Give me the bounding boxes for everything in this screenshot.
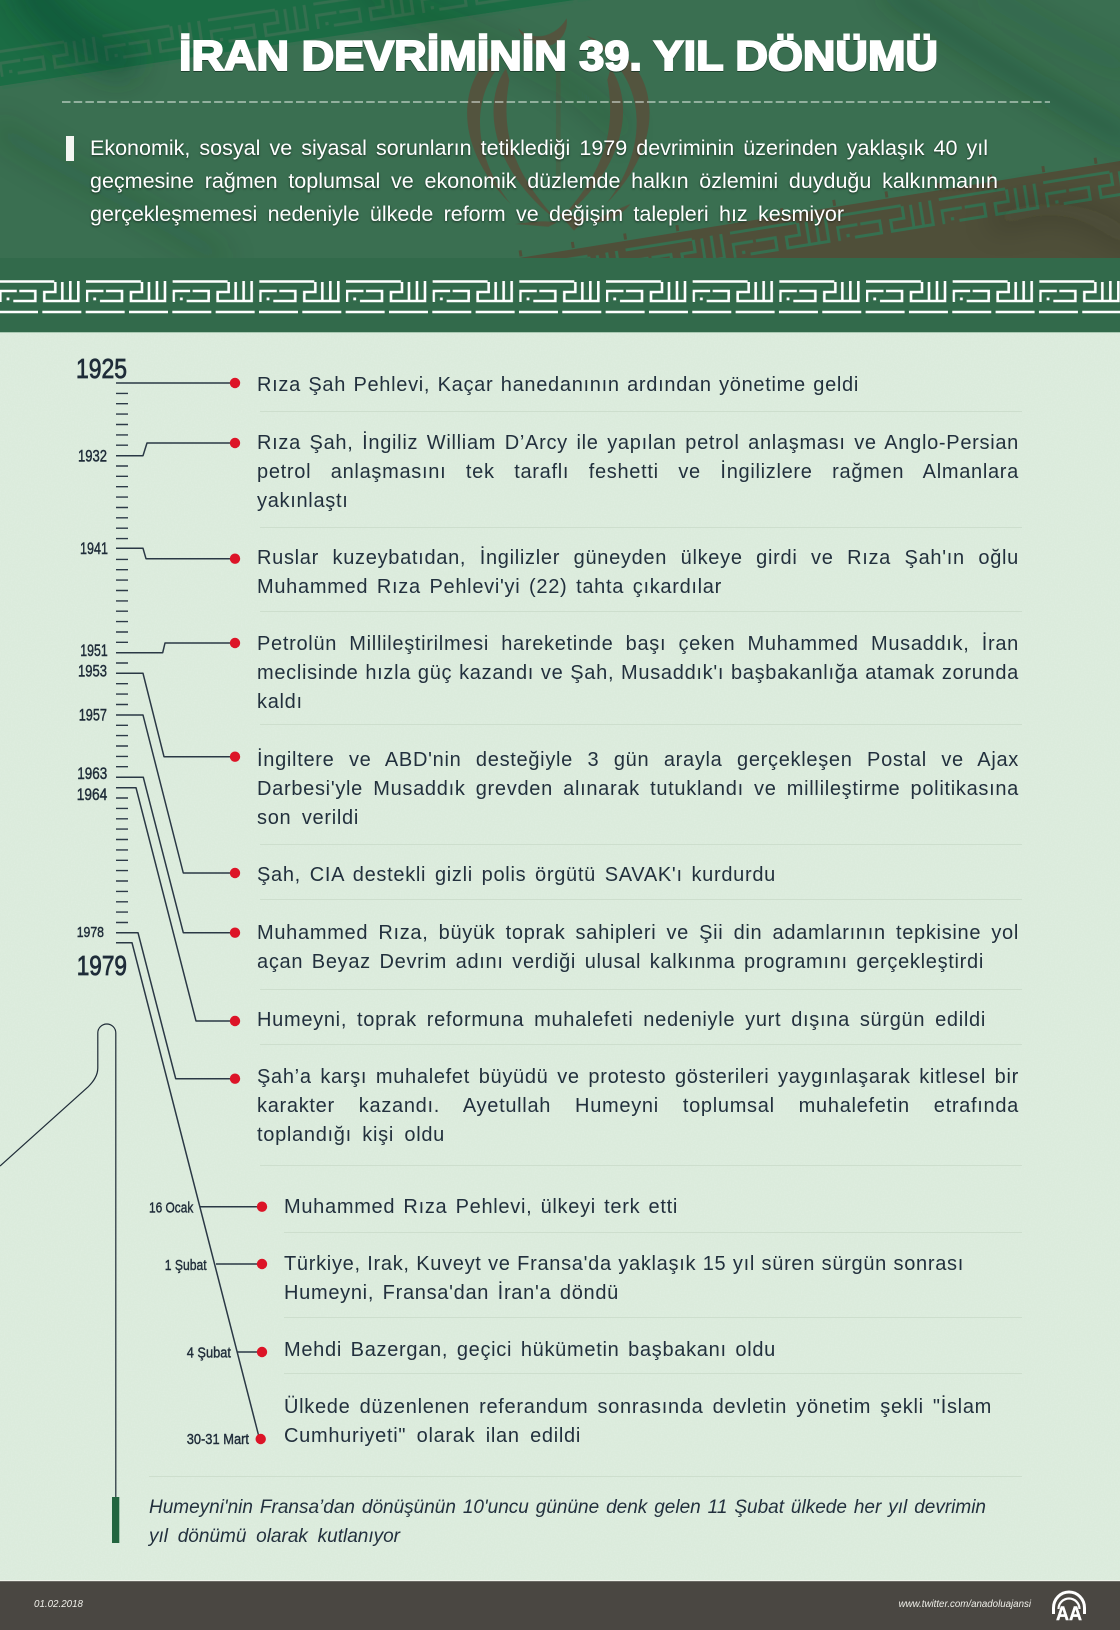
content background	[0, 333, 1120, 1581]
event 1 Şubat: Türkiye, Irak, Kuveyt ve Fransa'da yaklaşık 15 yıl süren sürgün sonrası	[284, 1253, 964, 1275]
intro text: Ekonomik, sosyal ve siyasal sorunların tetiklediği 1979 devriminin üzerinden yaklaşık 40 yıl	[90, 136, 988, 160]
date labels	[149, 1199, 250, 1448]
event 1 Şubat	[284, 1253, 964, 1304]
footer bar	[0, 1580, 1120, 1630]
event 1978	[257, 1066, 1019, 1146]
event 4 Şubat: Mehdi Bazergan, geçici hükümetin başbakanı oldu	[284, 1339, 776, 1361]
fabric folds	[12, 0, 1120, 215]
event 30-31 Mart	[284, 1395, 992, 1447]
event 1957: Şah, CIA destekli gizli polis örgütü SAVAK'ı kurdurdu	[257, 864, 776, 886]
event 1 Şubat: Humeyni, Fransa'dan İran'a döndü	[284, 1282, 619, 1304]
kufic white pattern	[0, 278, 1120, 306]
event 1925: Rıza Şah Pehlevi, Kaçar hanedanının ardından yönetime geldi	[257, 374, 859, 396]
event 1951	[257, 632, 1019, 713]
closing note: yıl dönümü olarak kutlanıyor	[149, 1526, 400, 1547]
date labels: 16 Ocak	[149, 1199, 194, 1216]
red dots	[230, 378, 267, 1444]
kufic band: bottom right	[518, 158, 1120, 258]
event 1953	[257, 748, 1019, 829]
year labels: 1963	[77, 765, 107, 783]
flag green field	[0, 0, 575, 86]
intro text	[90, 136, 998, 228]
closing green bar	[112, 1497, 119, 1543]
year labels	[76, 353, 127, 981]
event 1953: Darbesi'yle Musaddık grevden alınarak tutuklandı ve millileştirme politikasına	[257, 778, 1019, 800]
year labels: 1932	[78, 448, 107, 466]
ornament band	[0, 258, 1120, 334]
year labels: 1925	[76, 353, 127, 384]
event 30-31 Mart: Ülkede düzenlenen referandum sonrasında devletin yönetim şekli "İslam	[284, 1396, 992, 1418]
connector line: left curve	[0, 1024, 116, 1497]
date labels: 4 Şubat	[187, 1344, 232, 1361]
footer date: 01.02.2018	[34, 1599, 83, 1610]
intro text: gerçekleşmemesi nedeniyle ülkede reform ve değişim talepleri hız kesmiyor	[90, 202, 844, 226]
footer source link text: www.twitter.com/anadoluajansi	[899, 1599, 1032, 1610]
icon: agency logo	[1052, 1590, 1086, 1625]
event 1941	[257, 546, 1019, 598]
connector lines	[116, 383, 262, 1437]
year labels: 1941	[80, 540, 108, 558]
event 1978: karakter kazandı. Ayetullah Humeyni toplumsal muhalefetin etrafında	[257, 1095, 1019, 1117]
year labels: 1957	[79, 707, 107, 725]
dashed title divider	[62, 102, 1050, 103]
title: İRAN DEVRİMİNİN 39. YIL DÖNÜMÜ	[179, 32, 938, 79]
event 1941: Ruslar kuzeybatıdan, İngilizler güneyden ülkeye girdi ve Rıza Şah'ın oğlu	[257, 547, 1019, 569]
year labels: 1964	[77, 786, 107, 804]
event 1951: kaldı	[257, 691, 303, 713]
intro marker bar	[66, 136, 74, 161]
event 16 Ocak: Muhammed Rıza Pehlevi, ülkeyi terk etti	[284, 1196, 678, 1218]
intro text: geçmesine rağmen toplumsal ve ekonomik düzlemde halkın özlemini duyduğu kalkınmanın	[90, 169, 998, 193]
event 1932: petrol anlaşmasını tek taraflı feshetti ve İngilizlere rağmen Almanlara	[257, 461, 1019, 483]
event 1941: Muhammed Rıza Pehlevi'yi (22) tahta çıkardılar	[257, 576, 722, 598]
event 1963	[257, 922, 1019, 973]
event 30-31 Mart: Cumhuriyeti" olarak ilan edildi	[284, 1425, 581, 1447]
event 1932	[257, 431, 1019, 512]
icon: agency logo: AA	[1056, 1604, 1082, 1625]
flag dark field	[519, 161, 1120, 258]
event 1951: meclisinde hızla güç kazandı ve Şah, Musaddık'ı başbakanlığa atamak zorunda	[257, 662, 1019, 684]
event 1964: Humeyni, toprak reformuna muhalefeti nedeniyle yurt dışına sürgün edildi	[257, 1009, 986, 1031]
date labels: 30-31 Mart	[187, 1431, 250, 1448]
year ruler ticks	[116, 393, 128, 922]
kufic band: top left	[0, 0, 511, 77]
event 1953: son verildi	[257, 807, 359, 829]
event 1953: İngiltere ve ABD'nin desteğiyle 3 gün arayla gerçekleşen Postal ve Ajax	[257, 749, 1019, 771]
year labels: 1978	[77, 924, 104, 941]
event 1951: Petrolün Millileştirilmesi hareketinde başı çeken Muhammed Musaddık, İran	[257, 633, 1019, 655]
event 1978: toplandığı kişi oldu	[257, 1124, 445, 1146]
event 1932: yakınlaştı	[257, 490, 348, 512]
closing note: Humeyni'nin Fransa’dan dönüşünün 10'uncu gününe denk gelen 11 Şubat ülkede her yıl devrimin	[149, 1497, 986, 1518]
flag photo panel	[0, 0, 1120, 258]
closing note	[148, 1497, 986, 1547]
date labels: 1 Şubat	[165, 1257, 207, 1274]
year labels: 1979	[77, 950, 127, 981]
year labels: 1953	[78, 663, 107, 681]
year labels: 1951	[80, 642, 108, 660]
emblem	[467, 18, 650, 231]
event 1963: açan Beyaz Devrim adını verdiği ulusal kalkınma programını gerçekleştirdi	[257, 951, 984, 973]
event 1978: Şah’a karşı muhalefet büyüdü ve protesto gösterileri yaygınlaşarak kitlesel bir	[257, 1066, 1019, 1088]
event 1963: Muhammed Rıza, büyük toprak sahipleri ve Şii din adamlarının tepkisine yol	[257, 922, 1019, 944]
event 1932: Rıza Şah, İngiliz William D’Arcy ile yapılan petrol anlaşması ve Anglo-Persian	[257, 432, 1019, 454]
